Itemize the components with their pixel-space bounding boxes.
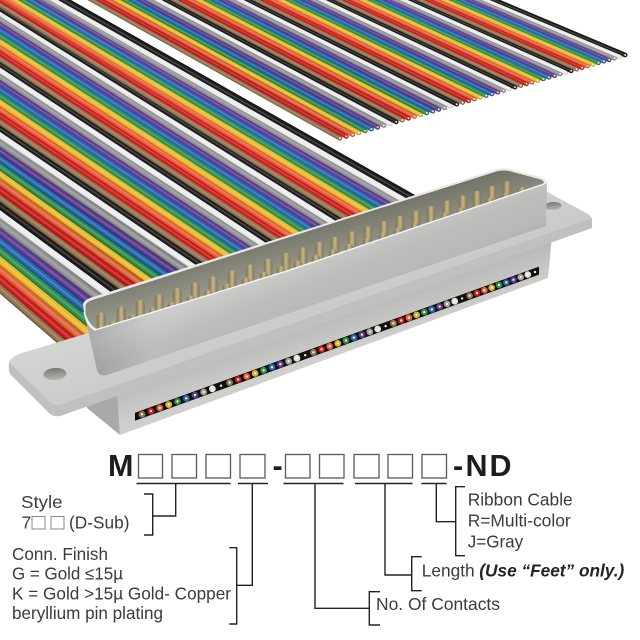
callout: Conn. Finish: K = Gold >15µ Gold- Copper (12, 584, 231, 604)
callout: Ribbon Cable (436, 484, 573, 556)
bracket and leader (385, 484, 422, 591)
shell interior (86, 170, 544, 329)
bracket and leader (436, 484, 465, 556)
callout: Conn. Finish: Conn. Finish (12, 544, 108, 564)
ribbon cable: lower, running into the connector (0, 0, 428, 359)
callout: Length (385, 484, 624, 591)
ribbon cable: upper, free end with stripped wires (85, 0, 626, 139)
connector rear body with wire slot (87, 236, 552, 435)
contact pins: rear row (98, 182, 510, 331)
separator dash: - (272, 449, 283, 483)
callout: Ribbon Cable: Ribbon Cable (468, 490, 573, 510)
code boxes: style and finish (138, 454, 265, 478)
callout: Ribbon Cable: J=Gray (468, 532, 523, 552)
callout: Conn. Finish: G = Gold ≤15µ (12, 564, 123, 584)
D-Sub connector (9, 168, 592, 435)
connector shell opening (83, 168, 547, 330)
callout: Style: Style (21, 492, 63, 512)
mounting flange (9, 188, 592, 416)
callout: Length: (Use “Feet” only.) (479, 561, 624, 581)
callout: Style (21, 484, 176, 535)
callout: Style: 7 (22, 512, 31, 532)
callout: Length: Length (422, 561, 475, 581)
callout: Ribbon Cable: R=Multi-color (468, 511, 571, 531)
callout: No. Of Contacts: No. Of Contacts (376, 594, 500, 614)
part number heading (108, 449, 512, 483)
bracket and leader (144, 484, 176, 535)
shell rim highlight (84, 181, 547, 330)
contact pins: front row (110, 188, 526, 336)
bracket and leader (229, 484, 252, 624)
bracket and leader (315, 484, 380, 625)
code boxes: contacts, length, ribbon (286, 454, 446, 478)
shell front wall (84, 181, 547, 375)
callout: Conn. Finish (12, 484, 252, 624)
callout: Style: (D-Sub) (69, 512, 130, 532)
suffix: -ND (453, 449, 512, 483)
underlines below code boxes (136, 482, 446, 484)
mounting hole: right (544, 201, 562, 211)
prefix letter: M (108, 449, 133, 483)
callout: No. Of Contacts (315, 484, 500, 625)
callout: Conn. Finish: beryllium pin plating (12, 603, 163, 623)
mounting hole: left (43, 367, 67, 381)
